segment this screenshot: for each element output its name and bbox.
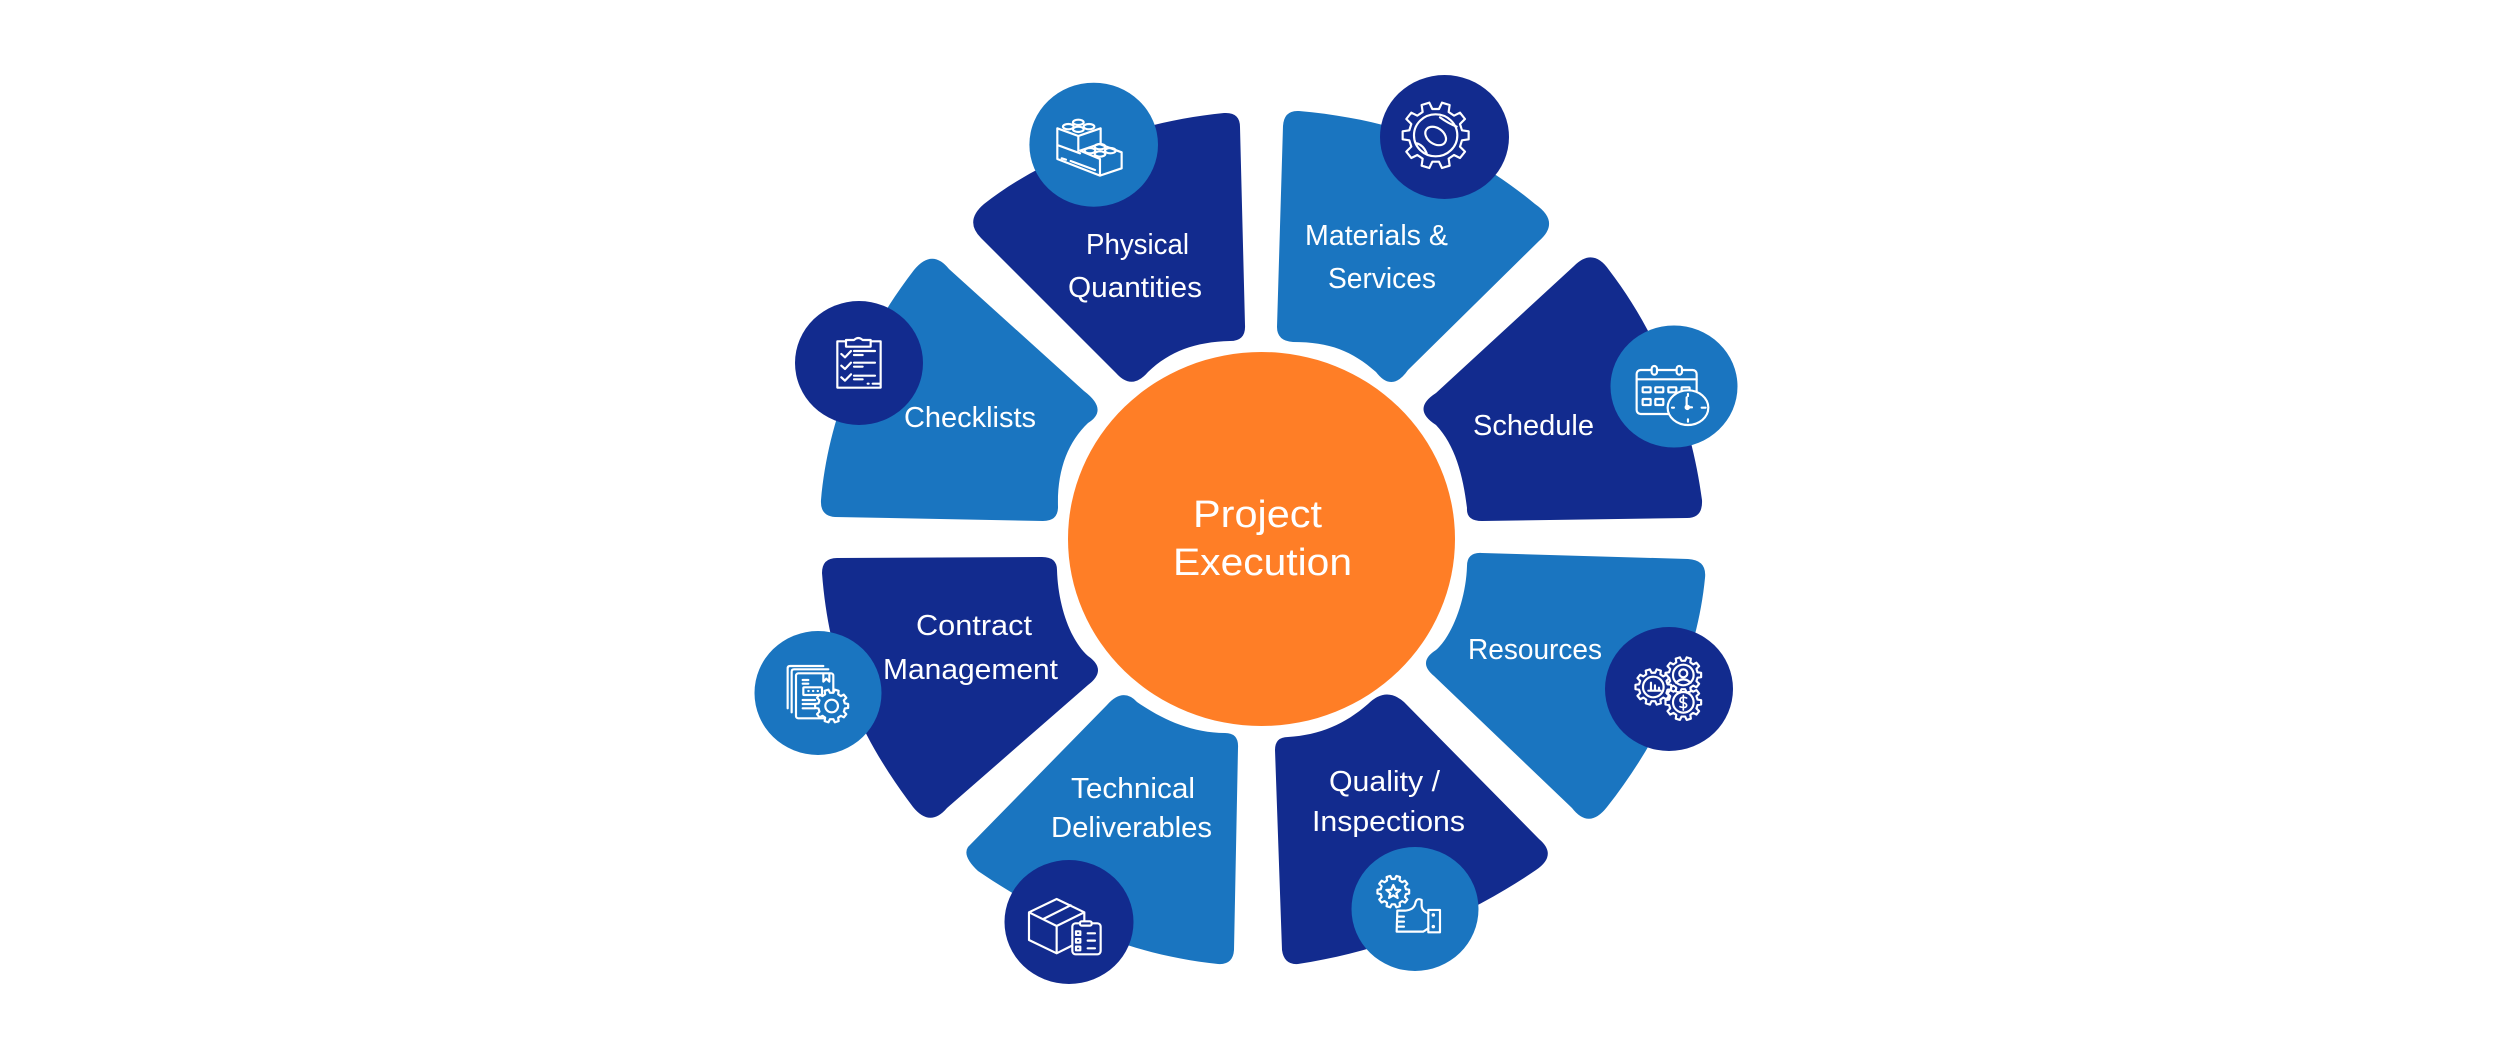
label: physical quantities [1068,229,1202,304]
label: technical deliverables: Deliverables [1051,812,1212,844]
icon badge: calendar and clock [1610,326,1738,448]
segment shape: resources [1426,553,1705,819]
icon badge: gear star and thumbs up [1352,847,1478,971]
label: checklists: Checklists [904,402,1036,434]
label: quality and inspections [1312,766,1465,838]
icon badge: documents and gear [754,631,882,755]
panel: technical deliverables [966,695,1238,984]
panel: resources [1426,553,1733,819]
label: physical quantities: Quantities [1068,272,1202,304]
label: resources: Resources [1468,634,1602,666]
panel: contract management [754,557,1098,818]
segment shape: contract management [822,557,1098,818]
icon badge: gear and globe [1380,75,1509,199]
panel: physical quantities [973,83,1245,382]
label: quality and inspections: Inspections [1312,806,1465,838]
label: contract management [883,610,1058,686]
center hub: project execution [1068,352,1455,726]
hub title: Execution [1173,542,1352,584]
segment shape: quality and inspections [1275,694,1548,964]
panel: quality and inspections [1275,694,1548,971]
label: contract management: Contract [916,610,1032,642]
label: materials and services: Materials & [1305,220,1448,252]
segment shape: technical deliverables [966,695,1238,964]
label: materials and services: Services [1328,263,1436,295]
icon badge: three gears [1605,627,1733,751]
hub title [1173,494,1352,584]
hub title: Project [1193,494,1322,536]
icon badge: box and clipboard [1004,860,1134,984]
label: schedule: Schedule [1473,410,1594,442]
label: technical deliverables: Technical [1071,773,1195,805]
label: quality and inspections: Quality / [1329,766,1441,798]
segment shape: materials and services [1277,111,1549,382]
icon badge: building blocks [1029,83,1158,207]
panel: checklists [795,259,1098,521]
icon badge: clipboard checklist [795,301,923,425]
panel: materials and services [1277,75,1549,382]
hub circle [1068,352,1455,726]
segment shape: physical quantities [973,113,1245,382]
label: materials and services [1305,220,1448,295]
segment shape: checklists [821,259,1098,521]
label: technical deliverables [1051,773,1212,844]
label: physical quantities: Physical [1086,229,1189,261]
segment shape: schedule [1424,257,1702,521]
panel: schedule [1424,257,1738,521]
label: contract management: Management [883,654,1058,686]
